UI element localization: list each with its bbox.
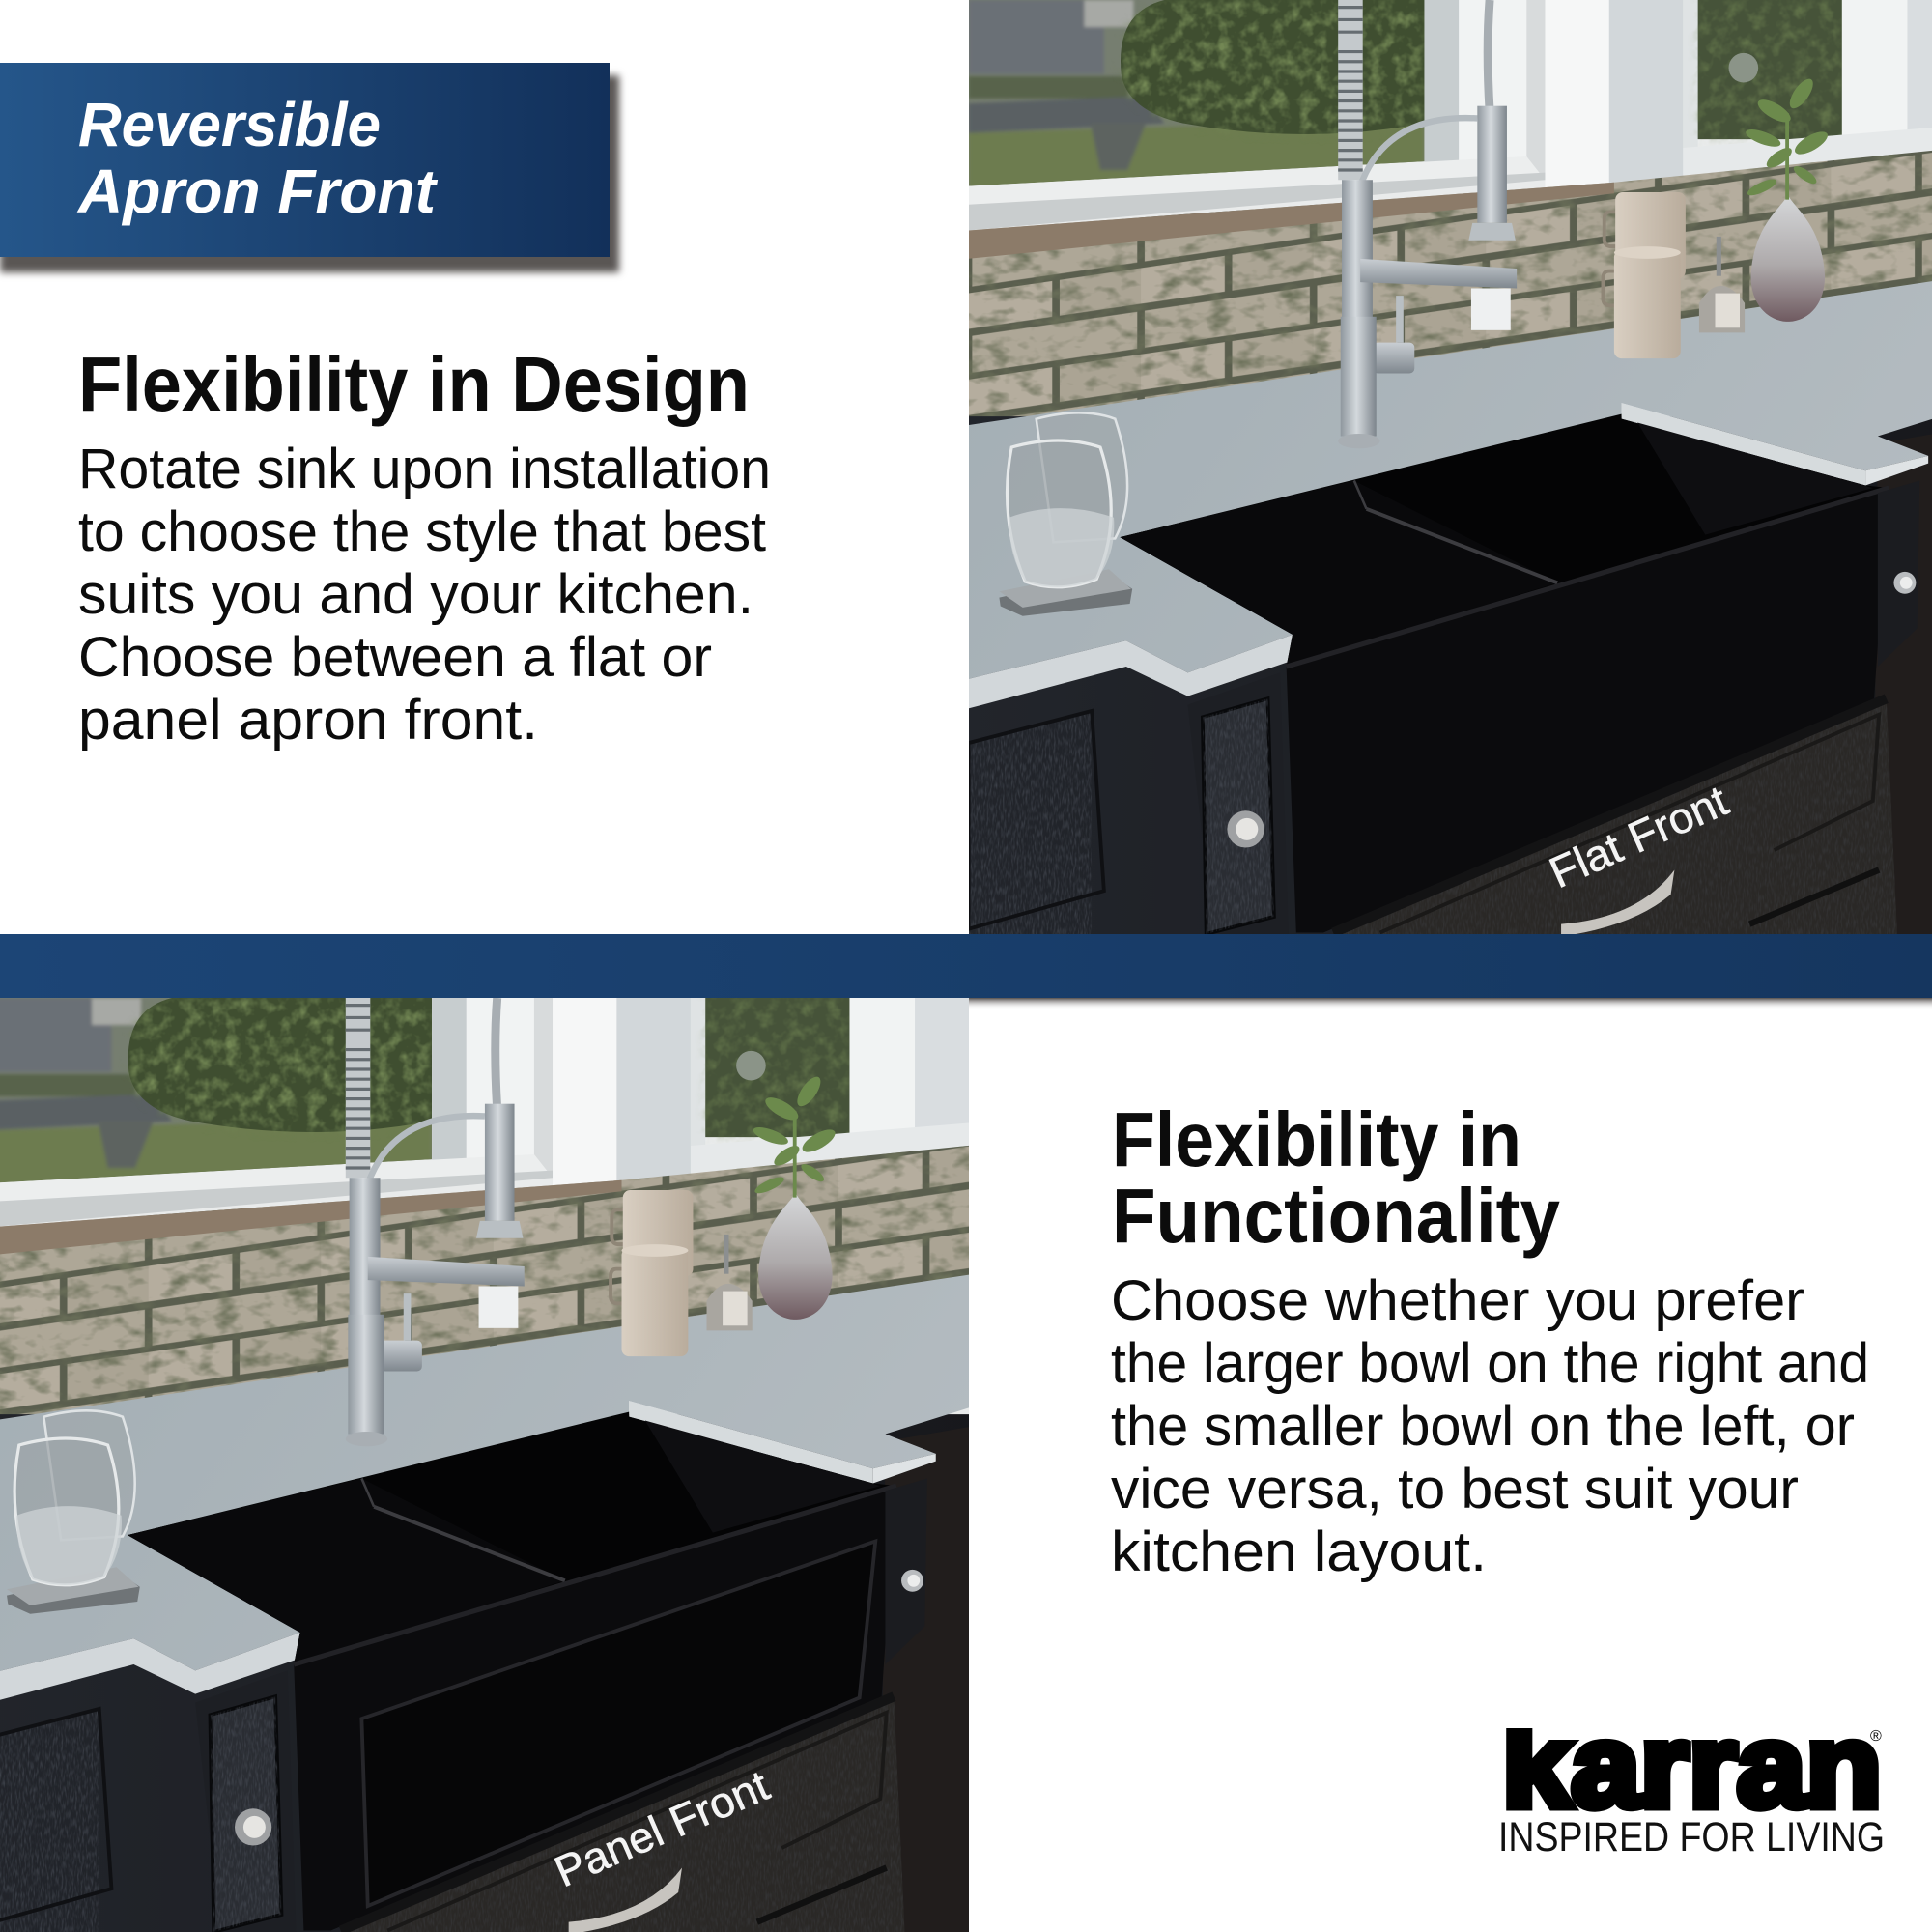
- body copy: [78, 438, 771, 752]
- body copy: the smaller bowl on the left, or: [1111, 1395, 1855, 1458]
- badge: Reversible Apron Front: [0, 63, 619, 272]
- logo: karran: [1501, 1728, 1882, 1851]
- heading: Functionality: [1112, 1173, 1560, 1259]
- apron: recessed panel: [361, 1541, 875, 1906]
- body copy: suits you and your kitchen.: [78, 563, 753, 626]
- body copy: [1111, 1269, 1869, 1583]
- registered mark: ®: [1870, 1728, 1882, 1745]
- body copy: Choose whether you prefer: [1111, 1269, 1804, 1332]
- body copy: the larger bowl on the right and: [1111, 1332, 1869, 1395]
- body copy: to choose the style that best: [78, 500, 766, 563]
- label: Panel Front: Panel Front: [548, 1760, 777, 1896]
- wordmark: karran: [1502, 1700, 1882, 1832]
- badge: Reversible Apron Front: Reversible: [78, 90, 381, 159]
- heading: Flexibility in Design: [78, 341, 750, 427]
- tagline: INSPIRED FOR LIVING: [1498, 1814, 1885, 1861]
- badge: Reversible Apron Front: Apron Front: [76, 156, 439, 226]
- blue divider band: [0, 934, 1932, 1009]
- text block: Flexibility in Functionality: [1111, 1096, 1869, 1583]
- heading: Flexibility in: [1112, 1096, 1521, 1182]
- body copy: vice versa, to best suit your: [1111, 1458, 1799, 1520]
- text block: Flexibility in Design: [78, 341, 771, 752]
- label: Flat Front: Flat Front: [1542, 776, 1736, 897]
- body copy: Choose between a flat or: [78, 626, 712, 689]
- body copy: Rotate sink upon installation: [78, 438, 771, 500]
- body copy: kitchen layout.: [1111, 1520, 1487, 1583]
- photo: panel front sink: [0, 998, 991, 1932]
- heading: [1112, 1096, 1560, 1259]
- body copy: panel apron front.: [78, 689, 538, 752]
- photo: flat front sink: [961, 0, 1932, 940]
